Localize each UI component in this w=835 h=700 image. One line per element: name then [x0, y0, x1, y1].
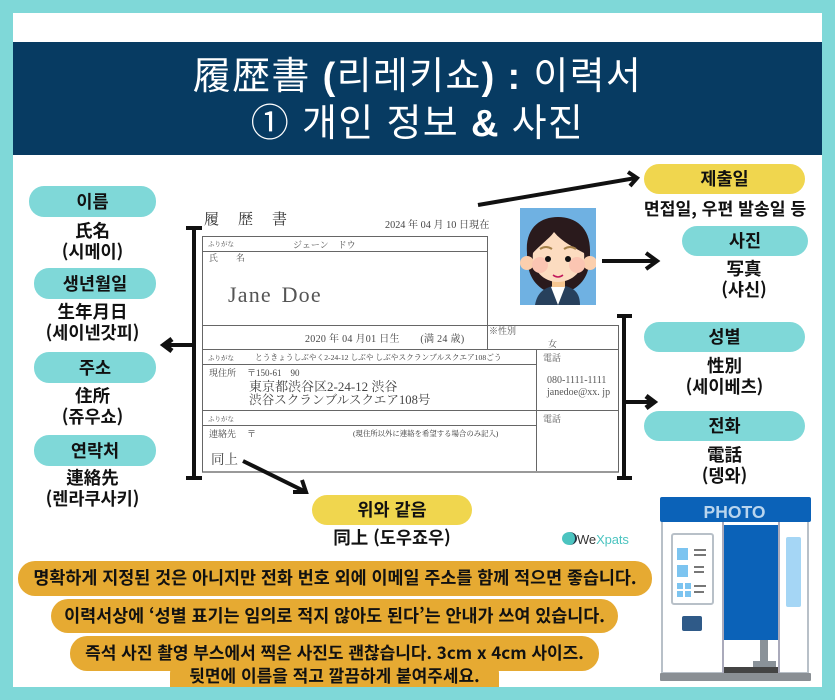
phone value: janedoe@xx. jp [547, 387, 610, 398]
contact address: 連絡先 [209, 429, 236, 439]
birth date value: 2020 年 04 月01 日生 (満 24 歳) [305, 334, 464, 345]
logo text: WeXpats [577, 532, 629, 547]
text: gender [686, 353, 763, 399]
right lower labels [644, 322, 805, 488]
icon: photo booth: PHOTO [704, 502, 765, 522]
arrow to same as above [243, 461, 306, 492]
furigana name: ジェーン ドウ [293, 240, 356, 250]
title line 2: ① 개인 정보 & 사진 [251, 92, 584, 147]
pill: address: 주소 [79, 355, 111, 380]
text: address: 住所 [75, 383, 110, 408]
pill: same as above: 위와 같음 [357, 497, 427, 522]
form date: 2024 年 04 月 10 日現在 [385, 220, 489, 231]
pill: phone: 전화 [708, 413, 741, 438]
text: contact: (렌라쿠사키) [46, 486, 139, 511]
furigana address: とうきょうしぶやく2-24-12 しぶや しぶやスクランブルスクエア108ごう [255, 353, 502, 362]
pill: photo [682, 226, 808, 256]
text: contact [46, 465, 139, 511]
text: phone: 電話 [707, 442, 742, 467]
pill: address [34, 352, 156, 383]
note 2: 이력서상에 ‘성별 표기는 임의로 적지 않아도 된다’는 안내가 쓰여 있습니다. [64, 603, 605, 628]
left labels [29, 186, 156, 511]
right top labels [644, 164, 808, 302]
text: submission date: 면접일, 우편 발송일 등 [644, 195, 806, 220]
contact note: (現住所以外に連絡を希望する場合のみ記入) [353, 429, 498, 438]
text: same as above: 同上 (도우죠우) [333, 525, 451, 550]
current address label: 現住所 [209, 368, 236, 378]
note 3 text: 뒷면에 이름을 적고 깔끔하게 붙여주세요. [189, 662, 480, 687]
same as above: 同上 [211, 452, 238, 467]
note 3 text: 즉석 사진 촬영 부스에서 찍은 사진도 괜찮습니다. 3cm x 4cm 사이즈. [85, 639, 584, 664]
pill: submission date [644, 164, 805, 194]
text: address [62, 383, 123, 429]
note 3 text [85, 639, 584, 687]
arrow to photo [602, 253, 657, 269]
name value: Jane Doe [228, 282, 322, 307]
note 1 [18, 561, 652, 596]
text: contact: 連絡先 [66, 465, 119, 490]
address value [249, 379, 430, 407]
text: birth date: 生年月日 [58, 299, 128, 324]
resume form [202, 211, 619, 473]
note 3 [70, 636, 599, 687]
left bracket with arrow [164, 228, 202, 478]
logo: WeXpats [562, 532, 629, 547]
note 3 background top [70, 636, 599, 671]
phone label 2: 電話 [543, 414, 561, 424]
text: address: (쥬우쇼) [62, 404, 123, 429]
gender value: 女 [548, 339, 557, 349]
text: photo: 写真 [726, 256, 762, 281]
gender label: ※性別 [489, 326, 516, 336]
furigana label: ふりがな [208, 241, 234, 248]
address value: 渋谷スクランブルスクエア108号 [249, 393, 430, 407]
pill: birth date [34, 268, 156, 299]
pill: submission date: 제출일 [700, 166, 749, 191]
text: photo: (샤신) [721, 277, 767, 302]
pill: gender [644, 322, 805, 352]
phone value [546, 375, 610, 398]
furigana label address: ふりがな [208, 355, 234, 362]
contact postal mark: 〒 [247, 429, 256, 439]
text: gender: (세이베츠) [686, 374, 763, 399]
text: birth date: (세이넨갓피) [46, 320, 139, 345]
note 3 background bottom [170, 661, 499, 687]
furigana contact: ふりがな [208, 416, 234, 423]
text: gender: 性別 [707, 353, 742, 378]
pill: name: 이름 [76, 189, 109, 214]
icon: id photo [520, 208, 596, 305]
text: phone [702, 442, 747, 488]
pill: same as above [312, 495, 472, 525]
icon: globe [562, 532, 577, 545]
arrow to submission date [478, 172, 637, 205]
text: name [62, 218, 123, 264]
title banner [13, 42, 822, 155]
phone value: 080-1111-1111 [547, 375, 606, 386]
text: photo [721, 256, 767, 302]
pill: gender: 성별 [708, 324, 741, 349]
icon: photo booth [660, 497, 811, 681]
phone label 1: 電話 [543, 353, 561, 363]
pill: phone [644, 411, 805, 441]
text: birth date [46, 299, 139, 345]
text: phone: (뎅와) [702, 463, 747, 488]
text: name: (시메이) [62, 239, 123, 264]
postal code: 〒150-61 90 [247, 368, 300, 378]
pill: name [29, 186, 156, 217]
pill: photo: 사진 [729, 228, 761, 253]
form title: 履歴書 [204, 212, 306, 228]
name label: 氏 名 [209, 253, 245, 263]
note 1: 명확하게 지정된 것은 아니지만 전화 번호 외에 이메일 주소를 함께 적으면 좋습니다. [33, 565, 637, 590]
address value: 東京都渋谷区2-24-12 渋谷 [249, 379, 397, 394]
pill: birth date: 생년월일 [63, 271, 127, 296]
text: name: 氏名 [75, 218, 110, 243]
pill: contact [34, 435, 156, 466]
title line 1: 履歴書 (리레키쇼) : 이력서 [193, 45, 642, 100]
pill: contact: 연락처 [71, 438, 119, 463]
right bracket with arrow [617, 316, 654, 478]
